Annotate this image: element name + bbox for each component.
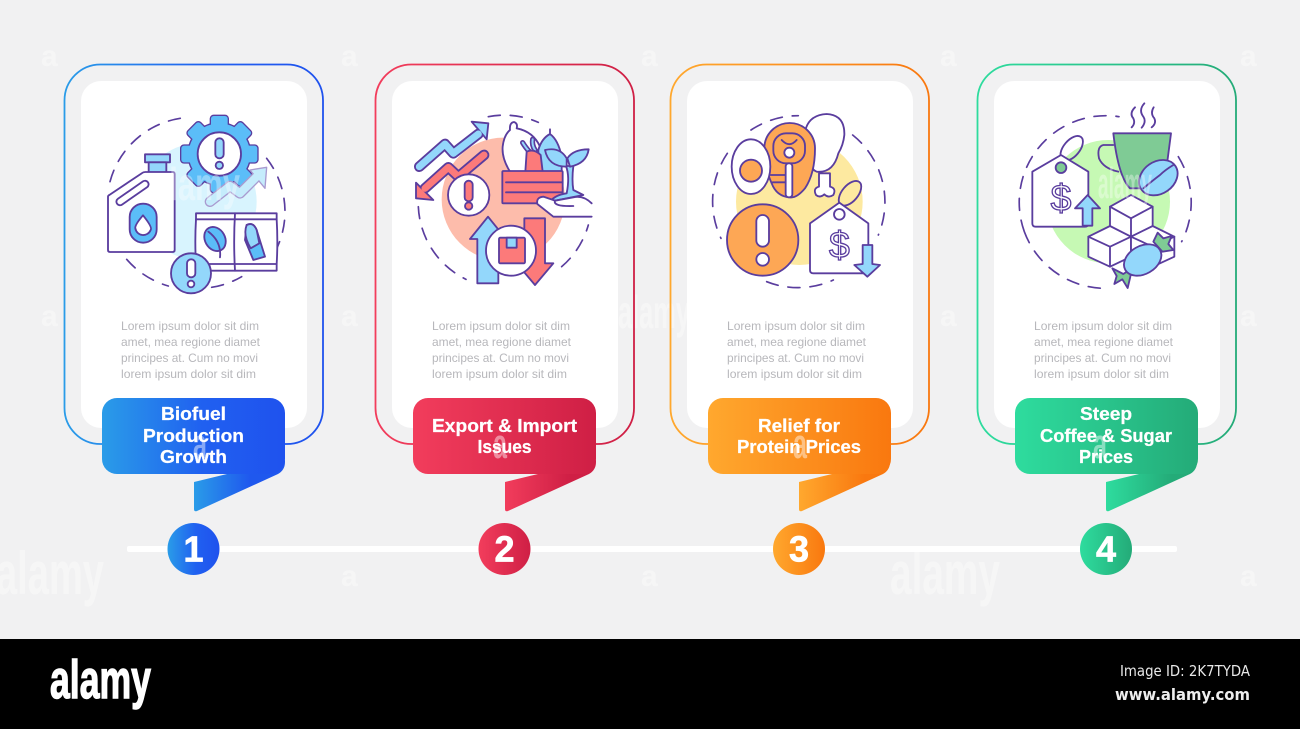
card inner 3 xyxy=(687,81,913,428)
banner 1: Biofuel xyxy=(161,404,226,424)
body text 4: amet, mea regione diamet xyxy=(1034,335,1174,349)
banner 4: Coffee & Sugar xyxy=(1040,426,1172,446)
body text 4: Lorem ipsum dolor sit dim xyxy=(1034,319,1172,333)
background watermarks: a xyxy=(341,300,358,333)
body text 1: Lorem ipsum dolor sit dim xyxy=(121,319,259,333)
banner 3: Protein Prices xyxy=(737,437,861,457)
banner 1: Growth xyxy=(160,447,227,467)
body text 4: principes at. Cum no movi xyxy=(1034,351,1171,365)
number 1 xyxy=(168,523,220,575)
background watermarks: alamy xyxy=(890,540,1000,607)
body text 1: amet, mea regione diamet xyxy=(121,335,261,349)
icon: egg, salmon, chicken, price tag xyxy=(713,114,885,288)
panel: step 1 biofuel production growth xyxy=(64,64,323,575)
body text 3 xyxy=(727,319,867,381)
footer website: www.alamy.com xyxy=(1115,685,1250,704)
foreground watermarks over banners: a xyxy=(193,420,207,467)
banner 4 xyxy=(1015,398,1198,511)
body text 1: lorem ipsum dolor sit dim xyxy=(121,367,256,381)
number 3 xyxy=(773,523,825,575)
card outline 1 xyxy=(64,64,323,444)
timeline line xyxy=(127,546,1177,552)
card inner 1 xyxy=(81,81,307,428)
footer image id: Image ID: 2K7TYDA xyxy=(1120,662,1251,680)
banner 3 xyxy=(708,398,891,511)
background watermarks: a xyxy=(940,300,957,333)
foreground watermarks over banners: a xyxy=(493,420,507,467)
banner 4: Steep xyxy=(1080,404,1132,424)
number 4 xyxy=(1080,523,1132,575)
body text 3: Lorem ipsum dolor sit dim xyxy=(727,319,865,333)
banner 2: Export & Import xyxy=(432,416,577,436)
body text 3: lorem ipsum dolor sit dim xyxy=(727,367,862,381)
banner 3: Relief for xyxy=(758,416,840,436)
number 2 xyxy=(478,523,530,575)
foreground watermarks over banners: a xyxy=(1093,420,1107,467)
footer logo: alamy xyxy=(50,650,151,710)
body text 2: amet, mea regione diamet xyxy=(432,335,572,349)
body text 1: principes at. Cum no movi xyxy=(121,351,258,365)
panel: step 4 steep coffee and sugar prices xyxy=(978,64,1236,575)
number 2: 2 xyxy=(494,528,515,570)
panel: step 3 relief for protein prices xyxy=(670,64,929,575)
body text 2: principes at. Cum no movi xyxy=(432,351,569,365)
banner 2 xyxy=(413,398,596,511)
banner 2: Issues xyxy=(478,437,532,457)
number 4: 4 xyxy=(1096,528,1116,570)
banner 4: Prices xyxy=(1079,447,1133,467)
background watermarks: a xyxy=(341,560,358,593)
banner 1 xyxy=(102,398,285,511)
body text 3: principes at. Cum no movi xyxy=(727,351,864,365)
icon: price tag, coffee, sugar, candy xyxy=(1019,103,1191,288)
text: alamy xyxy=(1098,159,1152,208)
background watermarks xyxy=(0,40,1257,607)
body text 4 xyxy=(1034,319,1174,381)
icon: trade arrows, produce, box xyxy=(416,115,592,285)
background watermarks: alamy xyxy=(0,540,104,607)
background watermarks: a xyxy=(41,300,58,333)
black footer bar xyxy=(0,639,1300,729)
foreground watermarks over icons xyxy=(152,158,1152,210)
body text 2: lorem ipsum dolor sit dim xyxy=(432,367,567,381)
body text 3: amet, mea regione diamet xyxy=(727,335,867,349)
background watermarks: a xyxy=(1240,560,1257,593)
foreground watermarks over banners xyxy=(193,420,1107,467)
body text 4: lorem ipsum dolor sit dim xyxy=(1034,367,1169,381)
background watermarks: a xyxy=(41,40,58,73)
background watermarks: a xyxy=(1240,40,1257,73)
card outline 3 xyxy=(670,64,929,444)
body text 1 xyxy=(121,319,261,381)
background watermarks: a xyxy=(641,560,658,593)
card inner 2 xyxy=(392,81,618,428)
body text 2 xyxy=(432,319,572,381)
icon: egg, salmon, chicken, price tag: $ xyxy=(829,223,850,265)
background watermarks: alamy xyxy=(618,286,690,338)
number 1: 1 xyxy=(183,528,204,570)
foreground watermarks over banners: a xyxy=(793,420,807,467)
number 3: 3 xyxy=(789,528,809,570)
card inner 4 xyxy=(994,81,1220,428)
background watermarks: a xyxy=(1240,300,1257,333)
background watermarks: a xyxy=(341,40,358,73)
foreground watermarks over icons: alamy xyxy=(152,158,240,210)
panel: step 2 export and import issues xyxy=(376,64,634,575)
card outline 2 xyxy=(376,64,634,444)
icon: biofuel jug, gear, bags xyxy=(108,116,285,293)
background watermarks: a xyxy=(940,40,957,73)
icon: price tag, coffee, sugar, candy: $ xyxy=(1051,177,1072,219)
background watermarks: a xyxy=(641,40,658,73)
banner 1: Production xyxy=(143,426,244,446)
body text 2: Lorem ipsum dolor sit dim xyxy=(432,319,570,333)
card outline 4 xyxy=(978,64,1236,444)
